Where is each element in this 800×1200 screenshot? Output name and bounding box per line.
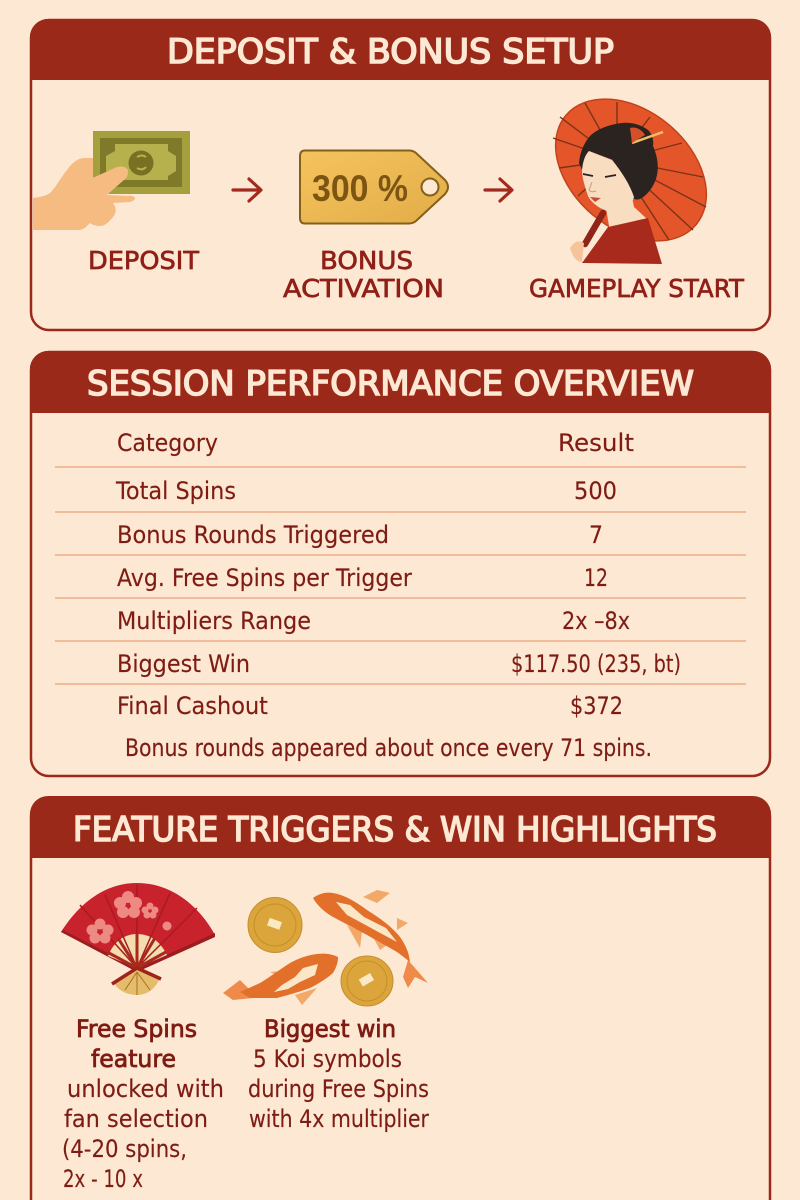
- panel header: session: [30, 351, 771, 413]
- table: session results: $117.50 (235, bt): [511, 650, 681, 678]
- panel: session performance overview: [30, 351, 771, 776]
- heading: feature triggers: FEATURE TRIGGERS & WIN HIGHLIGHTS: [73, 810, 717, 850]
- table: session results: [55, 429, 746, 720]
- icon: 300 percent gold tag: 300 %: [312, 168, 408, 209]
- table: session results: Bonus Rounds Triggered: [117, 521, 389, 549]
- label: bonus activation: BONUS: [320, 246, 413, 275]
- table: session results: 2x –8x: [562, 607, 630, 635]
- panel header: deposit: [30, 19, 771, 80]
- icon: red folding fan: [61, 883, 215, 995]
- text: free spins feature: Free Spins: [76, 1015, 197, 1043]
- text: biggest win: Biggest win: [264, 1015, 396, 1043]
- table: session results: Biggest Win: [117, 650, 250, 678]
- table: session results: 500: [574, 477, 617, 505]
- panel: deposit and bonus setup: [30, 19, 771, 330]
- text: biggest win: 5 Koi symbols: [253, 1045, 402, 1073]
- heading: deposit and bonus setup: DEPOSIT & BONUS SETUP: [167, 32, 614, 72]
- text: free spins feature: [62, 1015, 224, 1193]
- label: bonus activation: [283, 246, 444, 303]
- table: session results: 12: [584, 564, 608, 592]
- icon: 300 percent gold tag: [300, 150, 448, 224]
- table: session results: Total Spins: [115, 477, 236, 505]
- text: biggest win: with 4x multiplier: [249, 1105, 429, 1133]
- table: session results: 7: [589, 521, 603, 549]
- text: biggest win: during Free Spins: [248, 1075, 429, 1103]
- label: bonus activation: ACTIVATION: [283, 274, 444, 303]
- table: session results: Result: [558, 429, 634, 457]
- text: free spins feature: feature: [91, 1045, 176, 1073]
- table: session results: $372: [570, 692, 623, 720]
- text: biggest win: [248, 1015, 429, 1133]
- text: free spins feature: (4-20 spins,: [62, 1135, 187, 1163]
- text: free spins feature: unlocked with: [67, 1075, 224, 1103]
- label: deposit: DEPOSIT: [88, 246, 200, 275]
- panel header: features: [30, 796, 771, 858]
- table: session results: Final Cashout: [117, 692, 268, 720]
- table: session results: Category: [117, 429, 218, 457]
- label: gameplay start: GAMEPLAY START: [529, 274, 745, 303]
- panel: feature triggers and win highlights: [30, 796, 771, 1200]
- table: session results: Avg. Free Spins per Trigger: [117, 564, 412, 592]
- heading: session performance overview: SESSION PERFORMANCE OVERVIEW: [87, 364, 694, 404]
- icon: geisha with parasol: [528, 70, 734, 270]
- arrow: deposit to bonus: [233, 179, 261, 201]
- table: session results: Multipliers Range: [117, 607, 311, 635]
- arrow: bonus to gameplay: [485, 179, 512, 201]
- text: free spins feature: 2x - 10 x: [63, 1165, 143, 1193]
- icon: hand holding banknote: [33, 131, 190, 230]
- icon: koi fish and gold coins: [223, 890, 428, 1006]
- note: bonus frequency: Bonus rounds appeared about once every 71 spins.: [125, 734, 652, 762]
- text: free spins feature: fan selection: [64, 1105, 208, 1133]
